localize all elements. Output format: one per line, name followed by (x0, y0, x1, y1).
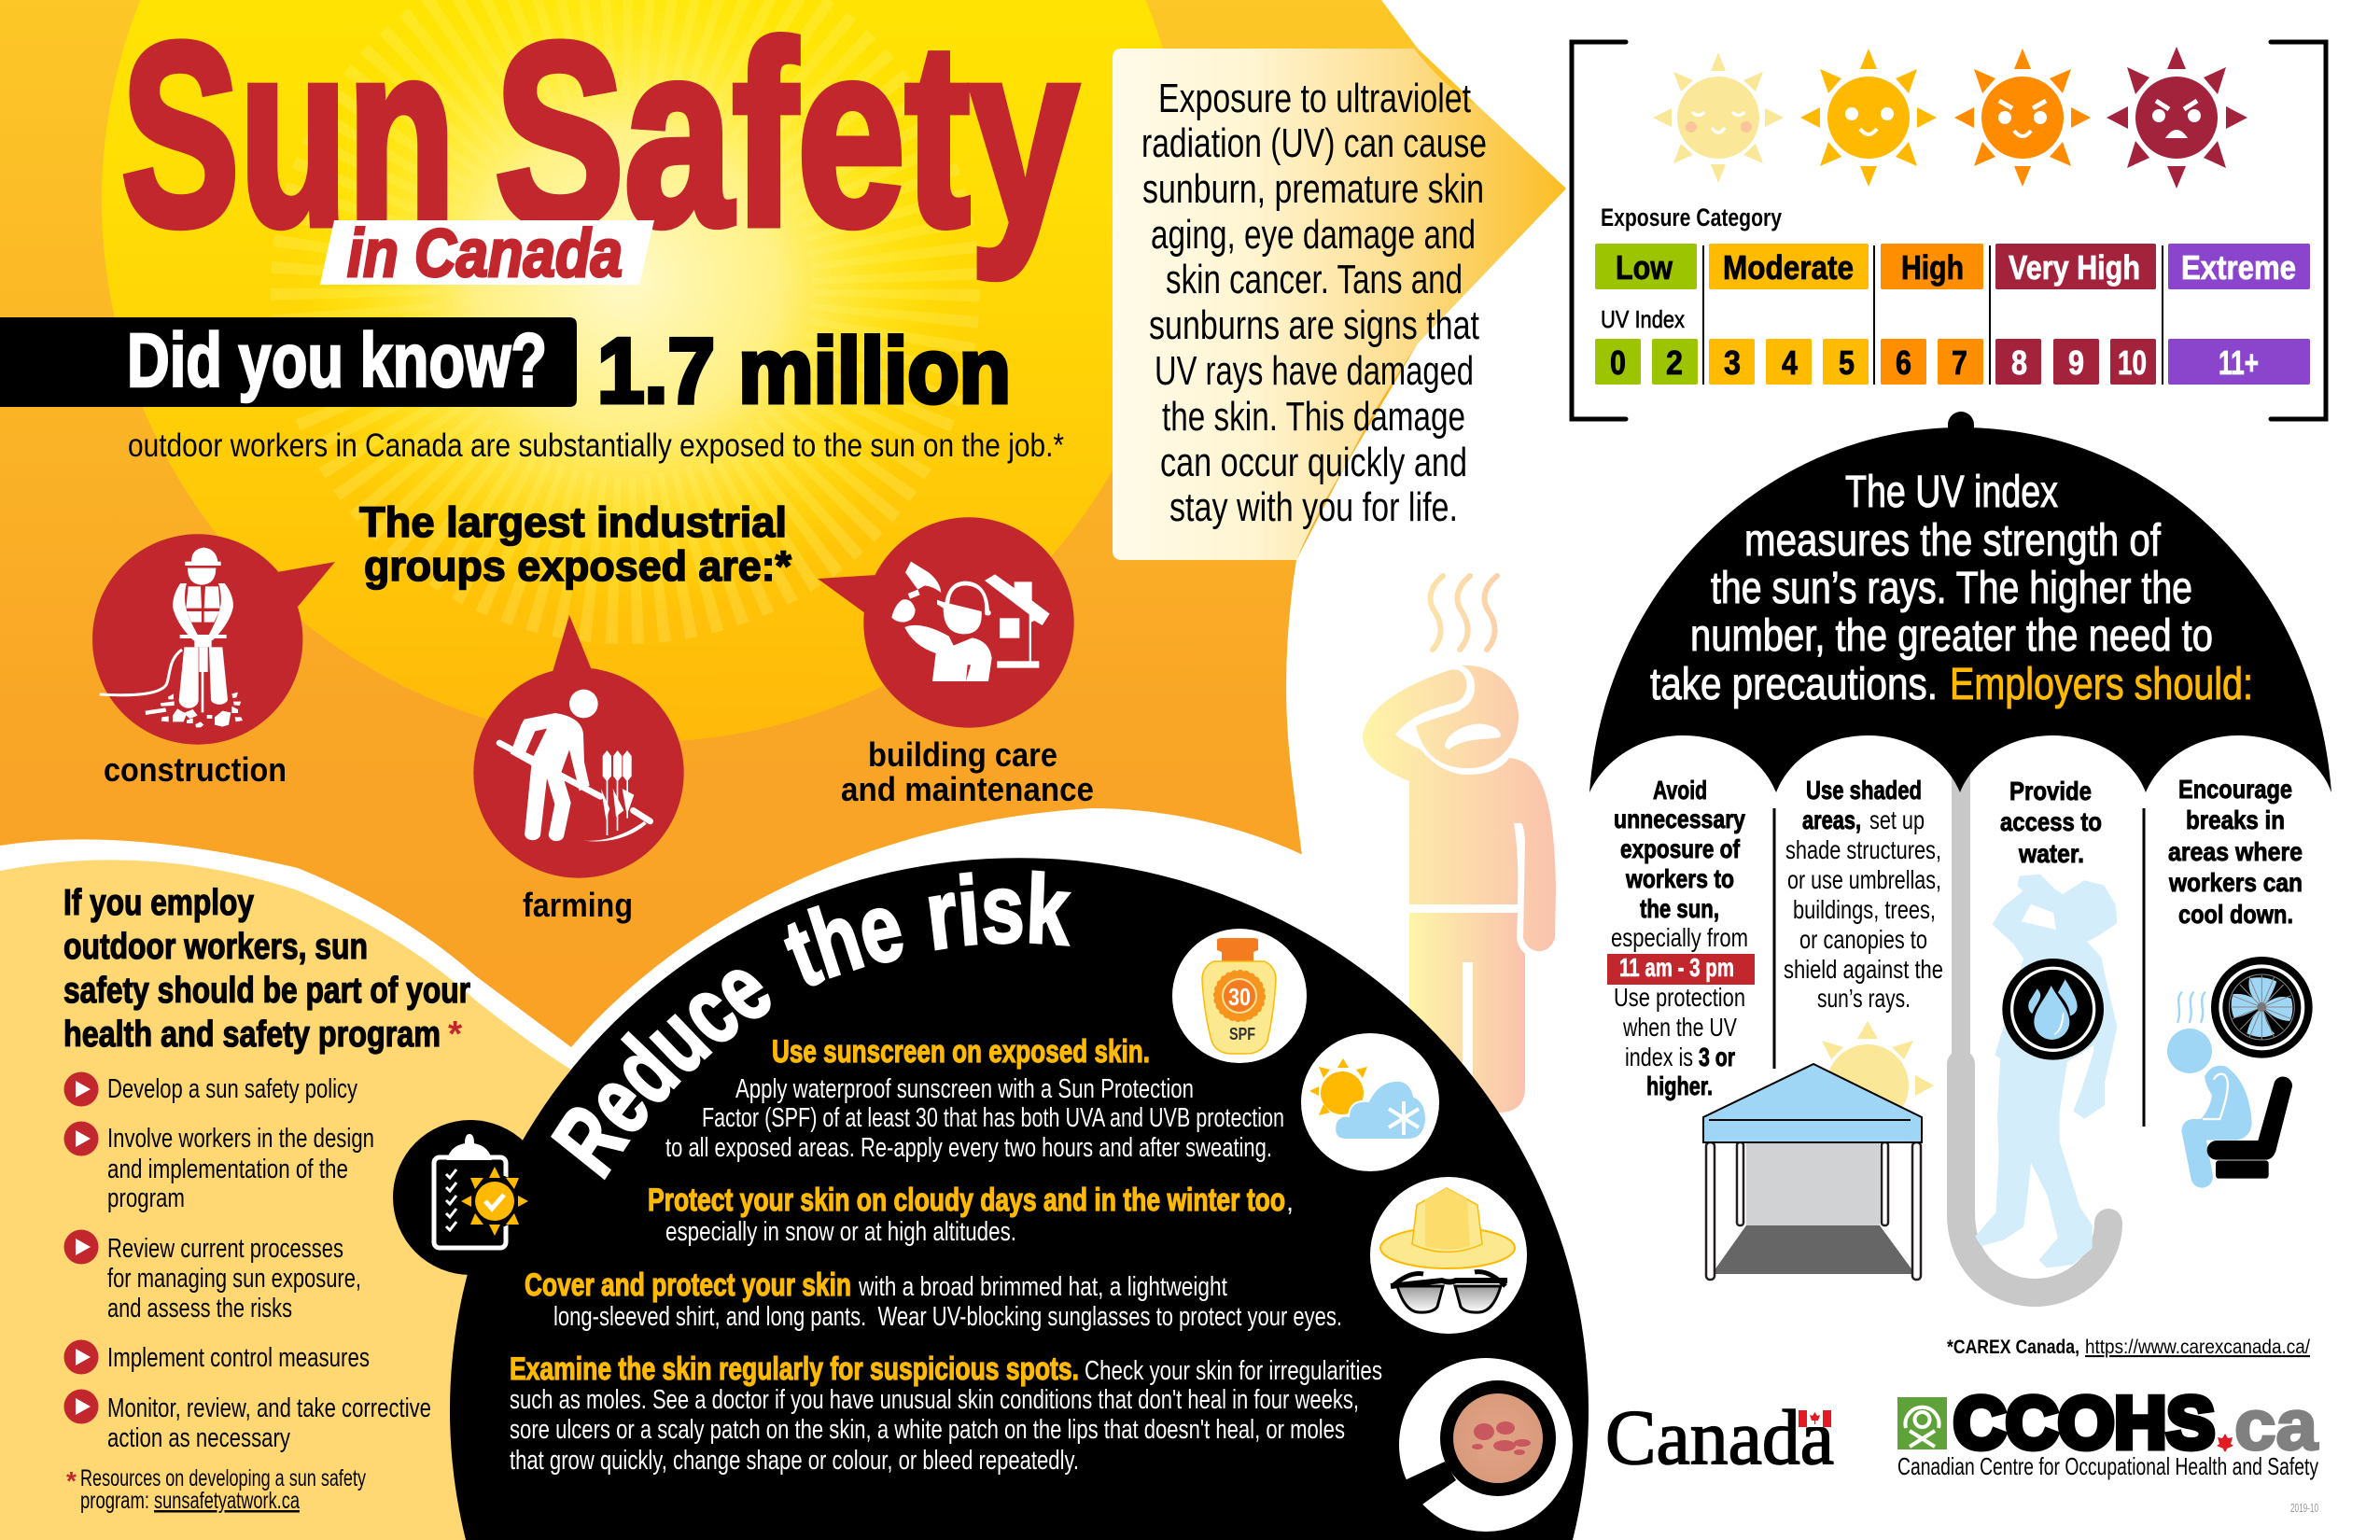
label: building care and maintenance: and maintenance (841, 770, 1094, 808)
column 3: access to water: water. (2018, 839, 2084, 868)
icon: low sun (1653, 52, 1784, 183)
column 2: shaded areas: set up (1869, 805, 1925, 834)
intro text: exposure: radiation (UV) can cause (1141, 120, 1487, 166)
date stamp: 2019-10 (2290, 1501, 2318, 1515)
intro text: exposure: UV rays have damaged (1155, 348, 1474, 394)
intro text: exposure: sunburn, premature skin (1142, 166, 1484, 212)
icon: clipboard checklist (434, 1134, 528, 1248)
column 3: access to water (2000, 777, 2102, 868)
umbrella heading: Employers should: (1950, 660, 2253, 709)
panel text: employer program heading: health and safety program (63, 1015, 441, 1055)
column 1: avoid exposure: 11 am - 3 pm (1619, 953, 1734, 982)
footnote: resources: sunsafetyatwork.ca (154, 1488, 300, 1514)
tip: cloudy days and winter (648, 1183, 1294, 1247)
heading: reduce the risk (485, 870, 1071, 1219)
tip: use sunscreen: Apply waterproof sunscreen with a Sun Protection (735, 1074, 1194, 1104)
icon: high sun (1954, 49, 2091, 187)
list: program steps: Review current processes (107, 1234, 343, 1264)
tip: cover and protect: long-sleeved shirt, and long pants. Wear UV-blocking sunglasses to protect your eyes. (553, 1302, 1342, 1332)
did you know banner (0, 317, 577, 407)
intro text: exposure: skin cancer. Tans and (1166, 257, 1463, 302)
exposure categories row: Moderate (1723, 248, 1854, 287)
list: program steps: action as necessary (107, 1423, 290, 1453)
uv index row: 11+ (2219, 343, 2259, 382)
uv scale bracket (1572, 42, 2326, 419)
list: program steps: and implementation of the (107, 1155, 348, 1184)
column 2: shaded areas: shade structures, (1785, 835, 1941, 864)
icon: fan and seated worker (2167, 957, 2313, 1188)
umbrella heading: The UV index (1845, 468, 2058, 517)
umbrella heading: number, the greater the need to (1690, 611, 2213, 661)
column 1: avoid exposure: when the UV (1622, 1013, 1737, 1042)
footnote: resources: * (66, 1466, 77, 1495)
umbrella heading (1650, 468, 2253, 709)
citation: carex canada (1947, 1337, 2310, 1358)
intro text: exposure: Exposure to ultraviolet (1158, 76, 1471, 121)
logo: CCOHS: ca (2234, 1386, 2318, 1465)
intro text: exposure (1141, 76, 1487, 530)
icon: canopy tent with sun (1703, 1021, 1934, 1280)
icon: sunscreen bottle: SPF (1229, 1025, 1255, 1043)
tip: cloudy days and winter: especially in snow or at high altitudes. (665, 1217, 1016, 1247)
panel text: employer program heading: outdoor workers, sun (63, 927, 368, 967)
exposure categories row: Extreme (2181, 248, 2296, 287)
column 4: cool down breaks: workers can (2168, 868, 2303, 897)
tip: cover and protect: Cover and protect your skin (525, 1267, 851, 1303)
label: building care and maintenance (841, 735, 1094, 808)
umbrella heading: measures the strength of (1744, 516, 2162, 566)
tip: examine the skin: such as moles. See a doctor if you have unusual skin conditions that don't heal in four weeks, (510, 1385, 1359, 1415)
citation: carex canada: *CAREX Canada, (1947, 1337, 2079, 1358)
panel text: employer program heading (63, 883, 470, 1055)
column 2: shaded areas: or canopies to (1799, 925, 1927, 954)
uv index row (1595, 339, 2310, 385)
orange background (0, 0, 1566, 1213)
tip: examine the skin: sore ulcers or a scaly patch on the skin, a white patch on the lips that doesn't heal, or moles (510, 1415, 1345, 1445)
column 3: access to water: access to (2000, 807, 2102, 836)
intro text: exposure: sunburns are signs that (1149, 302, 1479, 348)
icon: sunscreen bottle (1172, 929, 1307, 1063)
intro text: exposure: stay with you for life. (1169, 484, 1458, 530)
intro text: exposure: aging, eye damage and (1151, 212, 1476, 258)
icon: very high sun (2107, 47, 2247, 189)
column 2: shaded areas (1784, 776, 1943, 1013)
sun burst background (102, 0, 1184, 742)
column 2: shaded areas: or use umbrellas, (1787, 865, 1941, 894)
list: program steps: and assess the risks (107, 1294, 292, 1323)
column 2: shaded areas: Use shaded (1806, 776, 1922, 805)
tip: examine the skin: Examine the skin regularly for suspicious spots. (510, 1351, 1079, 1387)
logo: CCOHS: CCOHS (1953, 1381, 2215, 1463)
uv index row: 6 (1896, 343, 1911, 382)
icon: sunscreen bottle: 30 (1228, 983, 1251, 1011)
column 2: shaded areas: areas, (1802, 805, 1861, 834)
tip: use sunscreen: Factor (SPF) of at least 30 that has both UVA and UVB protection (702, 1103, 1284, 1133)
panel: UV exposure explanation (1113, 49, 1587, 560)
column 1: avoid exposure (1607, 776, 1755, 1100)
subtitle: in Canada: in Canada (347, 217, 623, 291)
icon: person drinking water (1977, 875, 2116, 1267)
statistic: 1.7 million: 1.7 million (597, 319, 1011, 422)
did you know banner: Did you know? (127, 318, 547, 403)
uv index row: 5 (1839, 343, 1855, 382)
list: program steps: for managing sun exposure, (107, 1264, 361, 1294)
uv index row: 4 (1782, 343, 1798, 382)
heading: reduce the risk: Reduce (551, 970, 771, 1180)
panel: employer program background (0, 839, 653, 1540)
column 4: cool down breaks: Encourage (2178, 775, 2292, 804)
tip: use sunscreen: to all exposed areas. Re-apply every two hours and after sweating. (665, 1133, 1272, 1163)
tip: examine the skin: Check your skin for irregularities (1085, 1356, 1382, 1386)
column dividers (1774, 808, 2144, 1127)
exposure categories row: High (1901, 248, 1964, 287)
list: program steps: Implement control measures (107, 1343, 370, 1373)
panel text: employer program heading: If you employ (63, 883, 254, 923)
label: construction: construction (104, 750, 287, 789)
label: building care and maintenance: building care (868, 735, 1057, 774)
citation: carex canada: https://www.carexcanada.ca/ (2085, 1337, 2310, 1358)
tip: examine the skin: that grow quickly, change shape or colour, or bleed repeatedly. (510, 1446, 1079, 1476)
column 4: cool down breaks: cool down. (2178, 900, 2293, 929)
statistic caption: outdoor workers in Canada are substantially exposed to the sun on the job.* (128, 427, 1064, 464)
umbrella canopy (1589, 412, 2331, 792)
logo: Canada wordmark: Canada (1605, 1394, 1834, 1481)
uv index row: 9 (2068, 343, 2084, 382)
uv index row: 7 (1952, 343, 1967, 382)
column 2: shaded areas: sun’s rays. (1817, 984, 1911, 1013)
panel text: employer program heading: safety should be part of your (63, 971, 470, 1011)
intro text: exposure: can occur quickly and (1160, 440, 1467, 485)
footnote: resources: program: (80, 1488, 149, 1514)
exposure categories row (1595, 244, 2310, 289)
heading: reduce the risk: the (784, 905, 903, 986)
tip: use sunscreen: Use sunscreen on exposed skin. (772, 1034, 1150, 1070)
icon: building care (818, 517, 1074, 728)
column 2: shaded areas: shield against the (1784, 955, 1943, 984)
icon: moderate sun (1800, 49, 1937, 187)
heading: largest industrial groups: The largest industrial (359, 498, 787, 546)
icon: hat and sunglasses (1370, 1177, 1527, 1334)
column 4: cool down breaks: areas where (2168, 837, 2303, 866)
tip: cover and protect (525, 1267, 1342, 1332)
column 3: access to water: Provide (2009, 777, 2092, 805)
title (121, 0, 1079, 281)
list: program steps: program (107, 1183, 185, 1213)
white swoosh under orange (461, 808, 1605, 1540)
column 1: avoid exposure: the sun, (1640, 894, 1719, 923)
footnote: resources: Resources on developing a sun safety (80, 1465, 366, 1491)
list: program steps (63, 1071, 431, 1453)
intro text: exposure: the skin. This damage (1162, 394, 1465, 440)
column 1: avoid exposure: index is (1625, 1043, 1693, 1071)
tip: examine the skin (510, 1351, 1382, 1476)
column 1: avoid exposure: Use protection (1614, 983, 1745, 1012)
heading: largest industrial groups (359, 498, 791, 590)
list: program steps: Develop a sun safety policy (107, 1074, 357, 1104)
tip: cloudy days and winter: , (1286, 1187, 1294, 1217)
umbrella heading: take precautions. (1650, 660, 1938, 709)
icon: farming (473, 615, 684, 878)
uv index row: 0 (1610, 343, 1626, 382)
column 1: avoid exposure: higher. (1646, 1071, 1713, 1100)
tip: use sunscreen (665, 1034, 1284, 1163)
uv index row: 8 (2011, 343, 2027, 382)
list: program steps: Involve workers in the design (107, 1124, 374, 1154)
column 4: cool down breaks (2168, 775, 2303, 929)
icon: sun and cloud with snowflake (1301, 1033, 1439, 1171)
column 4: cool down breaks: breaks in (2186, 805, 2285, 834)
column 1: avoid exposure: workers to (1625, 864, 1734, 893)
label: farming: farming (523, 886, 633, 924)
column 1: avoid exposure: especially from (1611, 923, 1748, 952)
column 1: avoid exposure: 3 or (1699, 1043, 1735, 1071)
icon: magnifier over skin (1391, 1358, 1573, 1532)
column 1: avoid exposure: exposure of (1620, 834, 1741, 863)
umbrella heading: the sun’s rays. The higher the (1711, 564, 2192, 613)
logo: CCOHS (1897, 1381, 2318, 1480)
uv index row: 10 (2118, 343, 2147, 382)
tip: cover and protect: with a broad brimmed hat, a lightweight (858, 1272, 1227, 1302)
column 2: shaded areas: buildings, trees, (1793, 895, 1936, 924)
umbrella handle (1961, 765, 2108, 1293)
column 1: avoid exposure: unnecessary (1614, 805, 1745, 833)
uv index row: 2 (1666, 343, 1683, 382)
person: overheated worker (1363, 576, 1556, 1167)
heading: reduce the risk: risk (928, 870, 1071, 950)
heading: largest industrial groups: groups exposed are:* (364, 542, 791, 590)
tip: cloudy days and winter: Protect your skin on cloudy days and in the winter too (648, 1183, 1285, 1218)
list: program steps: Monitor, review, and take corrective (107, 1393, 431, 1423)
panel: reduce the risk black dome (393, 858, 1589, 1540)
uv index row: 3 (1724, 343, 1741, 382)
exposure categories row: Low (1616, 248, 1673, 287)
icon: construction (92, 534, 335, 745)
label: exposure category: Exposure Category (1601, 203, 1782, 231)
footnote: resources (66, 1465, 366, 1514)
label: uv index: UV Index (1601, 305, 1685, 333)
exposure categories row: Very High (2009, 248, 2140, 287)
column 1: avoid exposure: Avoid (1653, 776, 1707, 805)
panel text: employer program heading: * (448, 1015, 463, 1055)
